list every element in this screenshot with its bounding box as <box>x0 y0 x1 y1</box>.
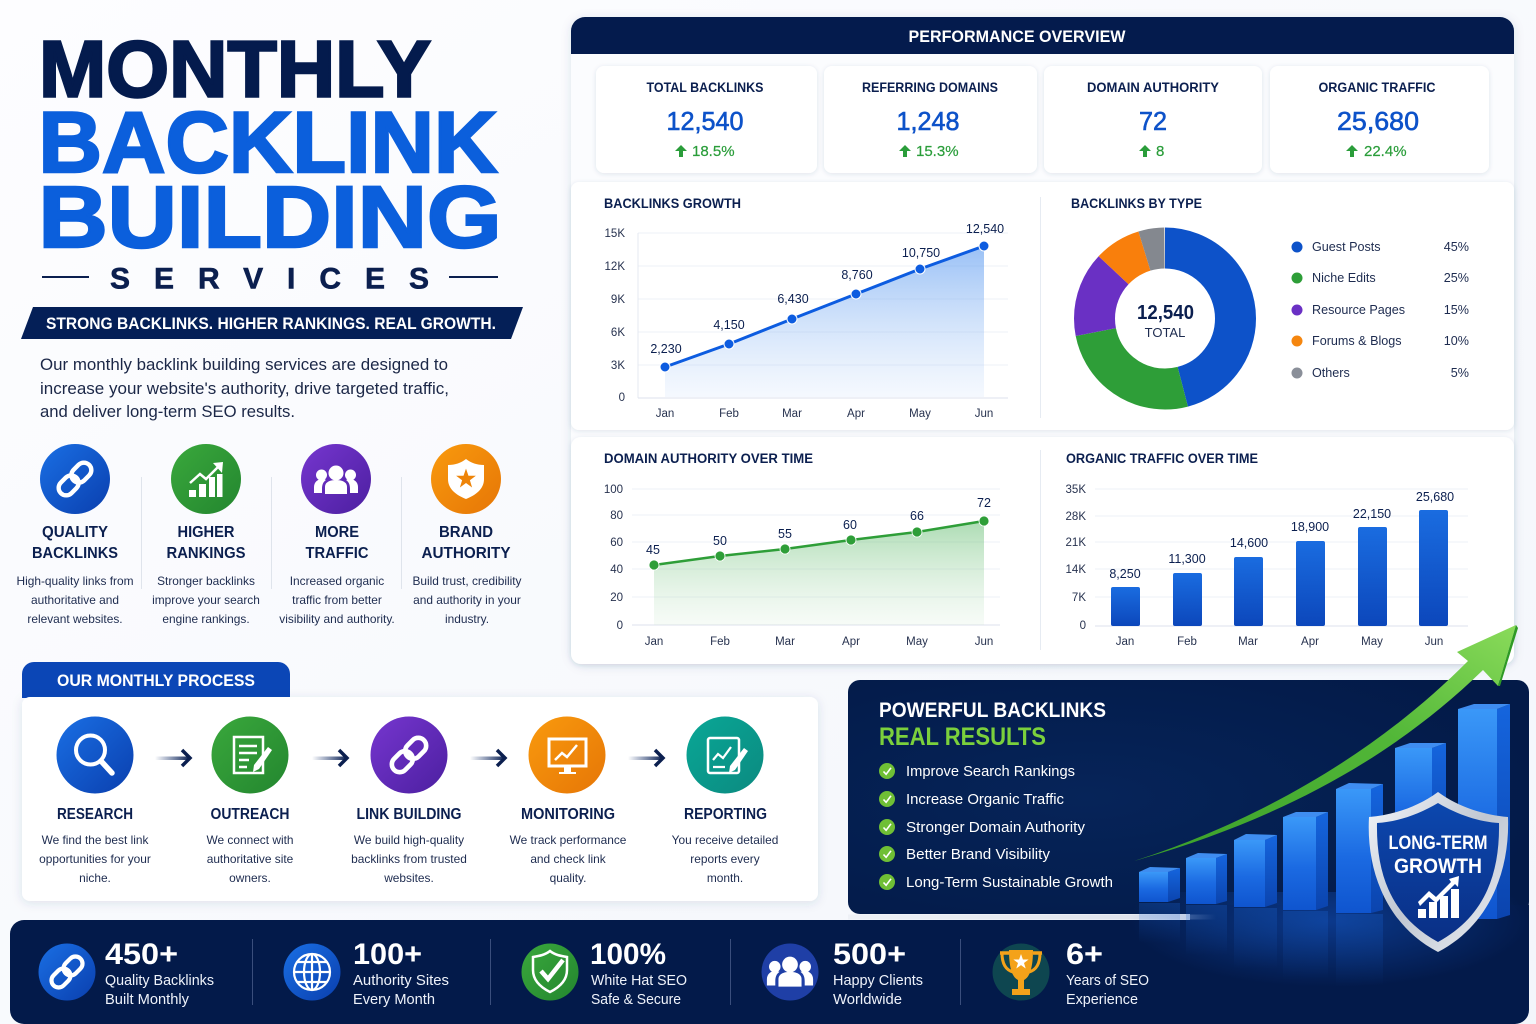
step: monitoring: MONITORING <box>521 806 615 823</box>
step: outreach: owners. <box>229 871 271 885</box>
chart: domain authority over time: 0 <box>617 620 623 632</box>
kpi: total backlinks: 12,540 <box>666 106 744 136</box>
kpi: referring domains: REFERRING DOMAINS <box>862 80 998 95</box>
kpi: domain authority: 8 <box>1156 143 1164 160</box>
tagline banner: STRONG BACKLINKS. HIGHER RANKINGS. REAL GROWTH. <box>46 315 496 333</box>
stat: 450+: Quality Backlinks <box>105 973 214 989</box>
step: reporting: month. <box>707 871 743 885</box>
step: link building: We build high-quality <box>354 833 464 847</box>
legend: Forums & Blogs <box>1312 334 1402 348</box>
stat: 450+ <box>38 938 214 1008</box>
title <box>38 24 502 266</box>
chart: organic traffic over time: 18,900 <box>1291 520 1329 534</box>
kpi: total backlinks: TOTAL BACKLINKS <box>646 80 764 95</box>
chart: organic traffic over time <box>1066 451 1468 648</box>
step: outreach: We connect with <box>206 833 294 847</box>
chart: domain authority over time: 72 <box>977 496 991 510</box>
chart: organic traffic over time: Apr <box>1301 636 1319 648</box>
stat: 500+: Worldwide <box>833 992 902 1008</box>
chart: domain authority over time: 60 <box>843 518 857 532</box>
chart: domain authority over time: 50 <box>713 534 727 548</box>
kpi: domain authority: DOMAIN AUTHORITY <box>1087 80 1219 95</box>
chart row 1 card <box>571 182 1514 430</box>
step: reporting: You receive detailed <box>672 833 778 847</box>
benefit: brand authority: industry. <box>445 612 489 626</box>
benefit: quality backlinks: High-quality links from <box>17 574 134 588</box>
step: research: opportunities for your <box>39 852 151 866</box>
chart: backlinks growth: Mar <box>782 408 802 420</box>
kpi: referring domains <box>824 66 1037 173</box>
kpi: organic traffic: 25,680 <box>1337 106 1419 136</box>
kpi: organic traffic: ORGANIC TRAFFIC <box>1318 80 1436 95</box>
chart: domain authority over time: 20 <box>610 592 623 604</box>
kpi: domain authority: 72 <box>1139 106 1167 136</box>
kpi: organic traffic <box>1270 66 1489 173</box>
step: reporting: reports every <box>690 852 760 866</box>
benefit: more traffic: traffic from better <box>292 593 382 607</box>
benefit: brand authority: AUTHORITY <box>422 545 511 562</box>
step: research: niche. <box>79 871 111 885</box>
benefit: more traffic <box>279 444 395 626</box>
benefit: quality backlinks: BACKLINKS <box>32 545 118 562</box>
long-term growth shield <box>1369 792 1508 952</box>
shield chart icon <box>1418 876 1459 918</box>
chart: backlinks growth: Apr <box>847 408 865 420</box>
step: outreach <box>206 716 294 885</box>
benefit: brand authority: BRAND <box>439 524 493 541</box>
benefit: more traffic: visibility and authority. <box>279 612 395 626</box>
benefit: quality backlinks: QUALITY <box>42 524 109 541</box>
panel header: PERFORMANCE OVERVIEW <box>908 27 1126 46</box>
long-term growth shield: LONG-TERM <box>1388 832 1488 854</box>
stat: 6+: Years of SEO <box>1066 973 1149 989</box>
chart: domain authority over time: DOMAIN AUTHORITY OVER TIME <box>604 451 813 466</box>
kpi: domain authority <box>1044 66 1262 173</box>
intro paragraph: Our monthly backlink building services are designed to <box>40 355 448 374</box>
chart: domain authority over time: 45 <box>646 543 660 557</box>
chart: backlinks growth: 8,760 <box>841 268 873 282</box>
chart: organic traffic over time: May <box>1361 636 1383 648</box>
chart: domain authority over time: 80 <box>610 510 623 522</box>
stat: 500+ <box>762 938 923 1008</box>
checklist <box>879 763 1113 891</box>
chart: organic traffic over time: 21K <box>1066 537 1086 549</box>
step: research: RESEARCH <box>57 806 133 823</box>
chart: backlinks growth: 12K <box>605 261 625 273</box>
bar 6 <box>1395 743 1446 860</box>
bar 5 <box>1336 783 1383 913</box>
bar 3 <box>1234 834 1277 907</box>
checklist: Better Brand Visibility <box>906 846 1050 863</box>
chart: domain authority over time <box>604 451 1000 648</box>
process tab <box>22 662 290 698</box>
chart: backlinks growth: 3K <box>611 360 625 372</box>
chart: backlinks growth: 0 <box>619 392 625 404</box>
chart: organic traffic over time: ORGANIC TRAFFIC OVER TIME <box>1066 451 1258 466</box>
kpi: organic traffic: 22.4% <box>1364 143 1407 160</box>
chart: organic traffic over time: 28K <box>1066 511 1086 523</box>
chart: organic traffic over time: 7K <box>1072 592 1086 604</box>
arrow <box>470 750 505 766</box>
step: reporting: REPORTING <box>684 806 767 823</box>
chart: organic traffic over time: 8,250 <box>1109 567 1141 581</box>
chart: organic traffic over time: 22,150 <box>1353 507 1391 521</box>
benefit: more traffic: TRAFFIC <box>306 545 368 562</box>
step: monitoring: and check link <box>530 852 606 866</box>
chart: backlinks by type: 12,540 <box>1137 302 1194 324</box>
chart: organic traffic over time: 14K <box>1066 564 1086 576</box>
step: link building: LINK BUILDING <box>356 806 462 823</box>
chart: domain authority over time: May <box>906 636 928 648</box>
bar 7 <box>1458 704 1510 919</box>
gap strip <box>848 914 1216 920</box>
benefit: higher rankings: improve your search <box>152 593 260 607</box>
chart: domain authority over time: 60 <box>610 537 623 549</box>
powerful backlinks copy <box>879 699 1113 891</box>
donut chart <box>1094 248 1236 389</box>
tagline banner <box>21 307 523 339</box>
chart: domain authority over time: Jan <box>645 636 663 648</box>
powerful backlinks copy: POWERFUL BACKLINKS <box>879 699 1106 722</box>
benefit: higher rankings: Stronger backlinks <box>157 574 255 588</box>
checklist: Long-Term Sustainable Growth <box>906 874 1113 891</box>
step: outreach: OUTREACH <box>210 806 290 823</box>
subtitle: services: SERVICES <box>110 262 429 296</box>
chart: backlinks growth: 6,430 <box>777 292 809 306</box>
checklist: Increase Organic Traffic <box>906 791 1064 808</box>
chart: organic traffic over time: Mar <box>1238 636 1258 648</box>
chart: domain authority over time: 66 <box>910 509 924 523</box>
chart: domain authority over time: 40 <box>610 564 623 576</box>
benefit: higher rankings: RANKINGS <box>166 545 246 562</box>
step: link building: backlinks from trusted <box>351 852 467 866</box>
chart row 2 card <box>571 437 1514 664</box>
stat: 100+ <box>284 938 449 1008</box>
kpi: referring domains: 15.3% <box>916 143 959 160</box>
stat: 450+: Built Monthly <box>105 992 190 1008</box>
benefits row <box>17 444 522 626</box>
stat: 500+: Happy Clients <box>833 973 923 989</box>
chart: organic traffic over time: 35K <box>1066 484 1086 496</box>
step: link building: websites. <box>383 871 434 885</box>
legend <box>1292 240 1469 380</box>
chart: organic traffic over time: Feb <box>1177 636 1197 648</box>
legend: 25% <box>1444 271 1469 285</box>
legend: 15% <box>1444 303 1469 317</box>
chart: backlinks growth: 12,540 <box>966 222 1004 236</box>
arrow <box>155 750 190 766</box>
panel: powerful backlinks background <box>848 680 1529 914</box>
checklist: Improve Search Rankings <box>906 763 1075 780</box>
benefit: brand authority <box>412 444 522 626</box>
chart: backlinks by type <box>1071 196 1469 389</box>
legend: 5% <box>1451 366 1469 380</box>
chart: backlinks growth: Jun <box>975 408 993 420</box>
step: monitoring <box>510 716 627 885</box>
chart: domain authority over time: Apr <box>842 636 860 648</box>
chart: domain authority over time: 100 <box>604 484 623 496</box>
legend: Others <box>1312 366 1350 380</box>
stat: 100%: White Hat SEO <box>591 973 687 989</box>
benefit: brand authority: Build trust, credibility <box>412 574 522 588</box>
stat: 6+ <box>992 938 1149 1008</box>
legend: Niche Edits <box>1312 271 1376 285</box>
stat: 6+: 6+ <box>1066 938 1103 971</box>
kpi: referring domains: 1,248 <box>896 106 960 136</box>
stat: 100+: Authority Sites <box>353 973 449 989</box>
chart: organic traffic over time: 11,300 <box>1168 552 1206 566</box>
panel: monthly process <box>22 662 818 901</box>
long-term growth shield: GROWTH <box>1394 855 1482 878</box>
stat: 100+: 100+ <box>353 938 422 971</box>
3d growth bars <box>1139 704 1510 986</box>
chart: organic traffic over time: Jun <box>1425 636 1443 648</box>
benefit: quality backlinks: relevant websites. <box>27 612 123 626</box>
chart: organic traffic over time: 25,680 <box>1416 490 1454 504</box>
chart: backlinks by type: BACKLINKS BY TYPE <box>1071 196 1202 211</box>
chart: backlinks growth: Feb <box>719 408 739 420</box>
step: research: We find the best link <box>42 833 148 847</box>
chart: backlinks growth: 2,230 <box>650 342 682 356</box>
powerful backlinks copy: REAL RESULTS <box>879 723 1046 751</box>
chart: domain authority over time: 55 <box>778 527 792 541</box>
stat: 6+: Experience <box>1066 992 1138 1008</box>
title: BUILDING <box>38 169 502 266</box>
legend: Resource Pages <box>1312 303 1405 317</box>
benefit: brand authority: and authority in your <box>413 593 521 607</box>
legend: Guest Posts <box>1312 240 1381 254</box>
process tab: OUR MONTHLY PROCESS <box>57 672 255 690</box>
bar 4 <box>1283 812 1328 910</box>
step: monitoring: We track performance <box>510 833 627 847</box>
stats bar <box>38 938 1149 1008</box>
chart: backlinks growth: 15K <box>605 228 625 240</box>
panel: performance overview <box>571 17 1514 664</box>
benefit: more traffic: Increased organic <box>290 574 384 588</box>
arrow <box>628 750 663 766</box>
kpi up arrows <box>675 145 1358 157</box>
legend: 45% <box>1444 240 1469 254</box>
bar 1 <box>1139 867 1180 902</box>
chart: backlinks growth: May <box>909 408 931 420</box>
stat: 100% <box>522 938 687 1008</box>
step: outreach: authoritative site <box>207 852 294 866</box>
legend: 10% <box>1444 334 1469 348</box>
benefit: quality backlinks <box>17 444 134 626</box>
benefit: quality backlinks: authoritative and <box>31 593 119 607</box>
chart: organic traffic over time: 0 <box>1080 620 1086 632</box>
stat: 100+: Every Month <box>353 992 435 1008</box>
chart: domain authority over time: Jun <box>975 636 993 648</box>
chart: backlinks growth: 9K <box>611 294 625 306</box>
intro paragraph: and deliver long-term SEO results. <box>40 402 295 421</box>
chart: backlinks growth: Jan <box>656 408 674 420</box>
intro paragraph: increase your website's authority, drive targeted traffic, <box>40 379 449 398</box>
benefit: more traffic: MORE <box>315 524 359 541</box>
arrow <box>312 750 347 766</box>
step: monitoring: quality. <box>550 871 586 885</box>
chart: backlinks by type: TOTAL <box>1145 325 1185 340</box>
benefit: higher rankings <box>152 444 260 626</box>
stat: 100%: Safe & Secure <box>591 992 681 1008</box>
chart: domain authority over time: Mar <box>775 636 795 648</box>
intro paragraph <box>40 355 449 421</box>
benefit: higher rankings: engine rankings. <box>162 612 250 626</box>
chart: backlinks growth: 10,750 <box>902 246 940 260</box>
step: reporting <box>672 716 778 885</box>
title: BACKLINK <box>38 95 498 191</box>
growth arrow <box>1134 625 1518 861</box>
stat: 450+: 450+ <box>105 938 178 971</box>
chart: backlinks growth: 6K <box>611 327 625 339</box>
stats bar background <box>10 920 1529 1024</box>
checklist: Stronger Domain Authority <box>906 819 1086 836</box>
chart: domain authority over time: Feb <box>710 636 730 648</box>
title: MONTHLY <box>39 24 431 114</box>
panel header <box>571 17 1514 54</box>
chart: backlinks growth <box>604 196 1008 420</box>
stat: 100%: 100% <box>590 938 666 971</box>
chart: organic traffic over time: 14,600 <box>1230 536 1268 550</box>
step: research <box>39 716 151 885</box>
step: link building <box>351 716 467 885</box>
floor glow <box>1130 892 1529 1024</box>
chart: backlinks growth: BACKLINKS GROWTH <box>604 196 741 211</box>
chart: backlinks growth: 4,150 <box>713 318 745 332</box>
benefit: higher rankings: HIGHER <box>178 524 234 541</box>
kpi: total backlinks <box>596 66 817 173</box>
bar 2 <box>1186 853 1227 904</box>
kpi: total backlinks: 18.5% <box>692 143 735 160</box>
chart: organic traffic over time: Jan <box>1116 636 1134 648</box>
stat: 500+: 500+ <box>833 938 906 971</box>
